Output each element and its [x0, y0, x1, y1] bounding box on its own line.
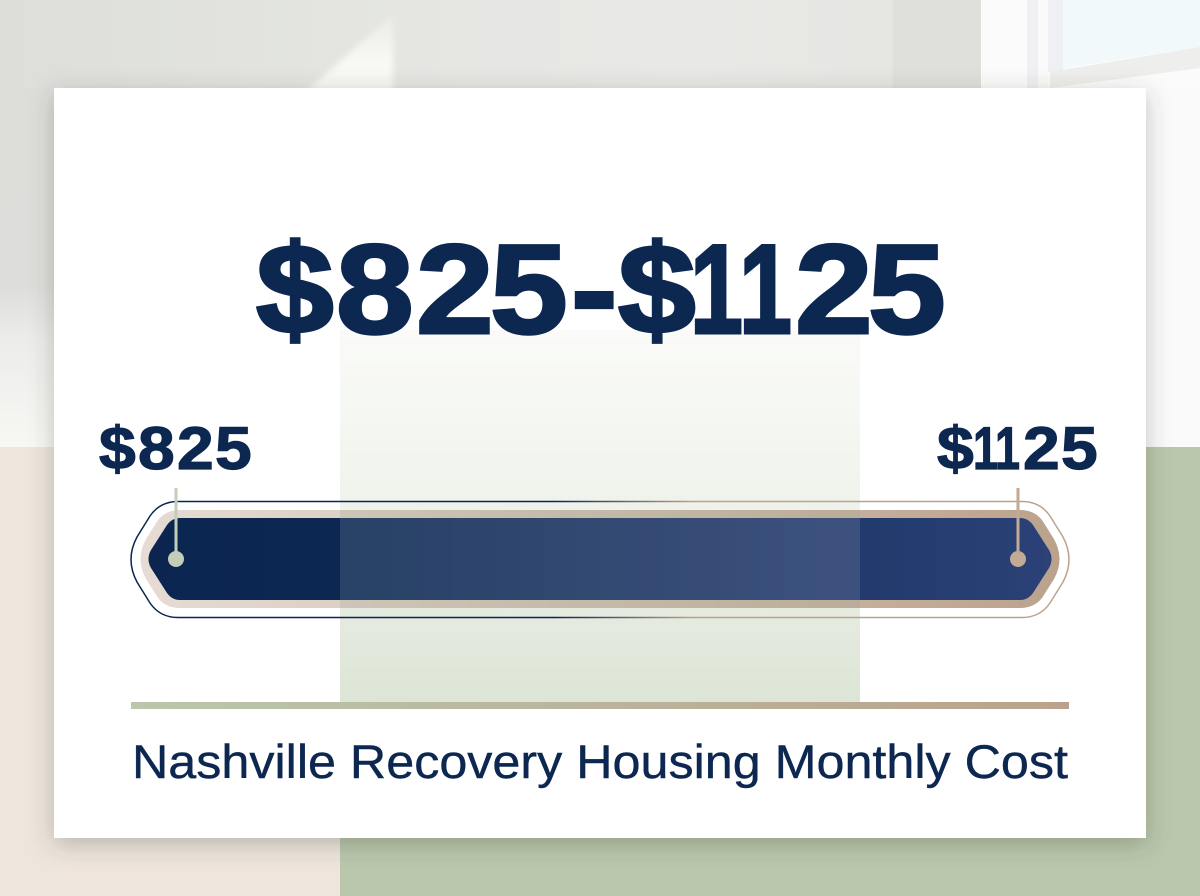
- white card: [54, 88, 1146, 838]
- infographic: 2: [1023, 415, 1060, 482]
- infographic: $: [937, 415, 974, 482]
- infographic: 2: [177, 415, 214, 482]
- bar fill: [148, 518, 1052, 600]
- bar border: [140, 510, 1060, 608]
- infographic: $: [256, 218, 334, 360]
- caption: Nashville Recovery Housing Monthly Cost: [132, 735, 1068, 788]
- infographic: 8: [336, 218, 414, 360]
- infographic: 1: [690, 218, 743, 360]
- range bar: [131, 488, 1069, 618]
- infographic: $: [99, 415, 136, 482]
- translucent green panel: [340, 330, 860, 702]
- panel overlay on border top: [340, 510, 860, 518]
- infographic: 5: [1061, 415, 1098, 482]
- high price label: [937, 415, 1098, 482]
- bar outer outline: [131, 502, 1069, 618]
- infographic: 2: [795, 218, 873, 360]
- main price heading: [256, 218, 946, 360]
- infographic: 5: [215, 415, 252, 482]
- infographic: -: [571, 218, 618, 360]
- green wall block: [340, 447, 1200, 896]
- window: [1027, 0, 1200, 88]
- panel overlay on bar: [340, 518, 860, 600]
- high marker: [1010, 488, 1026, 567]
- infographic: 1: [995, 415, 1020, 482]
- infographic: $: [618, 218, 696, 360]
- beige wall block: [0, 447, 340, 896]
- infographic: 8: [138, 415, 175, 482]
- infographic: 5: [490, 218, 568, 360]
- panel overlay on border bottom: [340, 600, 860, 608]
- low marker: [168, 488, 184, 567]
- gradient rule: [131, 702, 1069, 709]
- infographic: 1: [739, 218, 792, 360]
- infographic: 1: [973, 415, 998, 482]
- infographic: 2: [416, 218, 494, 360]
- low price label: [99, 415, 252, 482]
- infographic: 5: [868, 218, 946, 360]
